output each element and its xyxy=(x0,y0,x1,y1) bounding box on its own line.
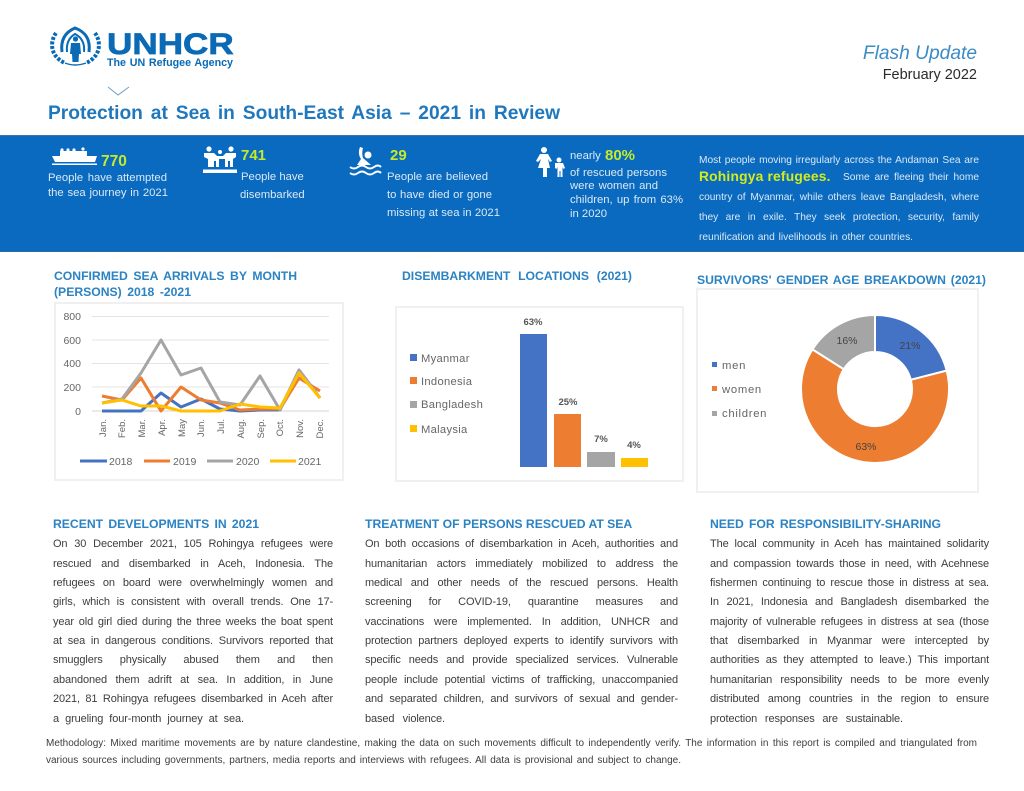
icon: group of people xyxy=(203,146,237,173)
body: and separated children, and survivors of sexual and gender- xyxy=(365,693,678,705)
body: and compassion towards those in need, with Acehnese xyxy=(710,558,989,570)
text block: Rohingya refugees: country of Myanmar, while others leave Bangladesh, where xyxy=(699,192,979,203)
body: On both occasions of disembarkation in Aceh, authorities and xyxy=(365,538,678,550)
title: Protection at Sea in South-East Asia – 2021 in Review xyxy=(48,103,560,124)
body: fishermen continuing to rescue those in distress at sea. xyxy=(710,577,989,589)
icon: UNHCR emblem xyxy=(50,26,101,66)
methodology note xyxy=(46,738,977,766)
line chart: arrivals by month: Jul. xyxy=(216,419,227,434)
heading: disembarkment chart: DISEMBARKMENT LOCATIONS (2021) xyxy=(402,269,632,283)
caption: of rescued persons xyxy=(570,167,667,179)
caption line four: in 2020 xyxy=(570,208,607,220)
body: girls, which is consistent with overall trends. One 17- xyxy=(53,596,333,608)
bar chart: disembarkment locations: Indonesia xyxy=(421,376,473,388)
panel: donut chart xyxy=(696,288,979,493)
text block: treatment of persons xyxy=(365,517,678,725)
heading: sea arrivals chart: (PERSONS) 2018 -2021 xyxy=(54,285,191,299)
donut chart: gender and age: 63% xyxy=(855,441,877,453)
caption line two: disembarked xyxy=(240,189,305,201)
number: nearly xyxy=(570,150,601,162)
caption line two: were women and xyxy=(570,180,658,192)
stat: 29 dead or missing xyxy=(350,147,500,219)
line chart: arrivals by month: 400 xyxy=(63,358,81,370)
body: refugees on board were overwhelmingly women and xyxy=(53,577,333,589)
stat: 741 disembarked xyxy=(203,146,305,201)
line chart: arrivals by month: 600 xyxy=(63,335,81,347)
body: In 2021, Indonesia and Bangladesh disembarked the xyxy=(710,596,989,608)
body: that disembarked in Myanmar were intercepted by xyxy=(710,635,989,647)
text block: responsibility-sharing xyxy=(710,517,990,725)
line chart: arrivals by month: 2018 xyxy=(109,456,133,468)
body: On 30 December 2021, 105 Rohingya refugees were xyxy=(53,538,333,550)
line chart: arrivals by month: Apr. xyxy=(157,419,168,436)
caption line two: to have died or gone xyxy=(387,189,492,201)
methodology note: various sources including governments, partners, media reports and interviews with refugees. All data is provisional and subject to change. xyxy=(46,755,681,766)
text block: Rohingya refugees xyxy=(699,155,979,243)
line chart: arrivals by month: 200 xyxy=(63,382,81,394)
line chart: arrivals by month: Jan. xyxy=(98,419,109,437)
body xyxy=(710,538,990,725)
body: a grueling four-month journey at sea. xyxy=(53,713,244,725)
body: based violence. xyxy=(365,713,445,725)
text block: Rohingya refugees: Most people moving irregularly across the Andaman Sea are xyxy=(699,155,979,166)
number: 741 xyxy=(241,147,266,164)
body: specific needs and provide specialized services. Vulnerable xyxy=(365,654,678,666)
line chart: arrivals by month: 800 xyxy=(63,311,81,323)
icon: boat xyxy=(52,147,97,165)
donut chart: gender and age: 21% xyxy=(899,340,921,352)
number: 80% xyxy=(605,147,635,164)
caption line two: the sea journey in 2021 xyxy=(48,187,168,199)
stat: 770 attempted xyxy=(48,147,168,199)
panel: key figures banner xyxy=(0,135,1024,252)
report label xyxy=(863,43,977,83)
body: at sea in dangerous conditions. Survivors reported that xyxy=(53,635,333,647)
bar chart: disembarkment locations: 7% xyxy=(594,434,608,445)
body: medical and other needs of the rescued persons. Health xyxy=(365,577,678,589)
number: 770 xyxy=(101,153,127,170)
donut chart: gender and age: 16% xyxy=(836,335,858,347)
body: 2021, 81 Rohingya refugees disembarked in Aceh after xyxy=(53,693,333,705)
body: The local community in Aceh has maintained solidarity xyxy=(710,538,989,550)
body: smugglers physically abused them and then xyxy=(53,654,333,666)
heading: RECENT DEVELOPMENTS IN 2021 xyxy=(53,517,259,531)
body: protection responses are sustainable. xyxy=(710,713,903,725)
icon: woman and child xyxy=(536,147,565,177)
line chart: arrivals by month: Dec. xyxy=(315,419,326,439)
caption: People have attempted xyxy=(48,172,167,184)
body xyxy=(365,538,678,725)
body: abandoned them adrift at sea. In addition, in June xyxy=(53,674,333,686)
panel: bar chart xyxy=(395,306,684,482)
line chart: arrivals by month: Mar. xyxy=(137,419,148,437)
logo: UNHCR xyxy=(50,26,234,69)
tagline: The UN Refugee Agency xyxy=(107,57,233,69)
line chart: arrivals by month: 2019 xyxy=(173,456,197,468)
line chart: arrivals by month: Nov. xyxy=(295,419,306,438)
body: distributed among countries in the region to ensure xyxy=(710,693,989,705)
text block: recent developments xyxy=(53,517,334,725)
bar chart: disembarkment locations: 25% xyxy=(558,397,578,408)
bar chart: disembarkment locations: 4% xyxy=(627,440,641,451)
heading: sea arrivals chart: CONFIRMED SEA ARRIVALS BY MONTH xyxy=(54,269,297,283)
chevron mark xyxy=(108,86,130,96)
body: screening for COVID-19, quarantine measures and xyxy=(365,596,678,608)
text block: Rohingya refugees: Rohingya refugees. xyxy=(699,169,831,184)
body: protection partners deployed experts to identify survivors with xyxy=(365,635,678,647)
methodology note: Methodology: Mixed maritime movements are by nature clandestine, making the data on such movements difficult to independently verify. The information in this report is compiled and triangulated from xyxy=(46,738,977,749)
text block: Rohingya refugees: Some are fleeing their home xyxy=(843,172,979,183)
line chart: arrivals by month: Aug. xyxy=(236,419,247,439)
text block: Rohingya refugees: reunification and livelihoods in other countries. xyxy=(699,232,913,243)
body: majority of vulnerable refugees in distress at sea (those xyxy=(710,616,989,628)
body: humanitarian actors immediately mobilized to address the xyxy=(365,558,678,570)
stat: 80% women and children xyxy=(536,147,683,220)
line chart: arrivals by month: 0 xyxy=(75,406,81,418)
line chart: arrivals by month: Jun. xyxy=(196,419,207,437)
caption line three: children, up from 63% xyxy=(570,194,683,206)
text block: Rohingya refugees: they are in exile. They seek protection, security, family xyxy=(699,212,979,223)
line chart: arrivals by month: May xyxy=(177,419,188,437)
body: humanitarian responsibility needs to be more evenly xyxy=(710,674,989,686)
panel: line chart xyxy=(54,302,344,481)
body: authorities as they attempted to leave.) This important xyxy=(710,654,989,666)
body: people include potential victims of trafficking, unaccompanied xyxy=(365,674,678,686)
caption: People are believed xyxy=(387,171,488,183)
heading: TREATMENT OF PERSONS RESCUED AT SEA xyxy=(365,517,632,531)
bar chart: disembarkment locations: Malaysia xyxy=(421,424,468,436)
body xyxy=(53,538,334,725)
caption line three: missing at sea in 2021 xyxy=(387,207,500,219)
line chart: arrivals by month: Oct. xyxy=(275,419,286,436)
number xyxy=(570,147,635,164)
body: rescued and disembarked in Aceh, Indonesia. The xyxy=(53,558,333,570)
line chart: arrivals by month: 2021 xyxy=(298,456,322,468)
heading: sea arrivals chart xyxy=(54,269,297,299)
flash update heading: Flash Update xyxy=(863,43,977,64)
heading: NEED FOR RESPONSIBILITY-SHARING xyxy=(710,517,941,531)
date: February 2022 xyxy=(883,67,977,83)
bar chart: disembarkment locations: Myanmar xyxy=(421,353,470,365)
number: 29 xyxy=(390,147,407,164)
line chart: arrivals by month: Sep. xyxy=(256,419,267,439)
body: vaccinations were implemented. In addition, UNHCR and xyxy=(365,616,678,628)
line chart: arrivals by month: 2020 xyxy=(236,456,260,468)
donut chart: gender and age: women xyxy=(721,384,762,396)
line chart: arrivals by month: Feb. xyxy=(117,419,128,438)
caption: People have xyxy=(241,171,304,183)
donut chart: gender and age: children xyxy=(722,408,767,420)
wordmark: UNHCR xyxy=(107,28,234,61)
body: year old girl died during the three weeks the boat spent xyxy=(53,616,333,628)
bar chart: disembarkment locations: Bangladesh xyxy=(421,399,483,411)
heading: gender age chart: SURVIVORS' GENDER AGE BREAKDOWN (2021) xyxy=(697,273,986,287)
bar chart: disembarkment locations: 63% xyxy=(523,317,543,328)
donut chart: gender and age: men xyxy=(722,360,746,372)
icon: swimmer xyxy=(350,147,382,176)
